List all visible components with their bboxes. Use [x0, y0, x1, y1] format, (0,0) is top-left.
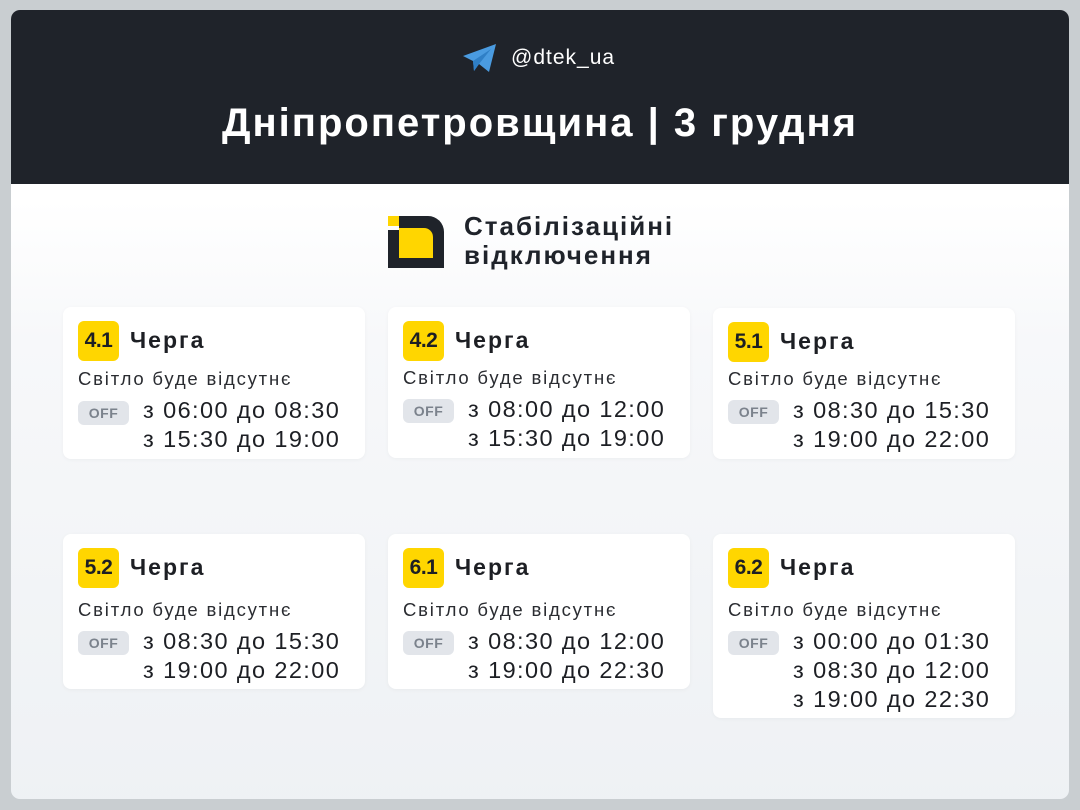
- card 6.2: з 19:00 до 22:30: [793, 686, 990, 712]
- card 5.2: з 08:30 до 15:30: [143, 628, 340, 654]
- card 6.2: Світло буде відсутнє: [728, 599, 942, 620]
- card 6.1: [388, 534, 690, 689]
- card 4.2: 4.2: [410, 329, 437, 352]
- card 5.2: з 19:00 до 22:00: [143, 657, 340, 683]
- handle text: @dtek_ua: [511, 46, 615, 69]
- card 5.2: [63, 534, 365, 689]
- card 4.1: з 06:00 до 08:30: [143, 397, 340, 423]
- card 5.2: Світло буде відсутнє: [78, 599, 292, 620]
- card 6.1: 6.1: [410, 556, 437, 579]
- heading: stabilization outages: Стабілізаційні: [464, 211, 674, 241]
- heading: stabilization outages: відключення: [464, 240, 653, 270]
- card 6.2: з 00:00 до 01:30: [793, 628, 990, 654]
- card 5.2: OFF: [89, 635, 118, 651]
- header bar: [11, 10, 1069, 184]
- card 6.1: Світло буде відсутнє: [403, 599, 617, 620]
- card 4.1: Світло буде відсутнє: [78, 368, 292, 389]
- card 4.1: [63, 307, 365, 459]
- heading: stabilization outages: [464, 211, 674, 270]
- card 4.2: OFF: [414, 403, 443, 419]
- card 4.1: Черга: [130, 327, 205, 353]
- card 6.2: 6.2: [735, 556, 762, 579]
- card 6.1: Черга: [455, 554, 530, 580]
- card 4.1: 4.1: [85, 329, 112, 352]
- card 5.1: [713, 308, 1015, 459]
- card 5.2: Черга: [130, 554, 205, 580]
- card 5.1: Світло буде відсутнє: [728, 368, 942, 389]
- card 5.1: з 19:00 до 22:00: [793, 426, 990, 452]
- icon: telegram: [463, 44, 496, 72]
- card 4.2: з 15:30 до 19:00: [468, 425, 665, 451]
- logo: [388, 216, 444, 268]
- card 6.2: з 08:30 до 12:00: [793, 657, 990, 683]
- title: Дніпропетровщина | 3 грудня: [222, 101, 858, 145]
- card 4.2: Черга: [455, 327, 530, 353]
- card 6.2: [713, 534, 1015, 718]
- card 4.1: OFF: [89, 405, 118, 421]
- card 4.2: [388, 307, 690, 458]
- card 6.2: OFF: [739, 635, 768, 651]
- card 5.1: 5.1: [735, 330, 762, 353]
- card 4.2: з 08:00 до 12:00: [468, 396, 665, 422]
- card 5.1: з 08:30 до 15:30: [793, 397, 990, 423]
- card 6.1: з 19:00 до 22:30: [468, 657, 665, 683]
- card 5.2: 5.2: [85, 556, 112, 579]
- card 6.1: з 08:30 до 12:00: [468, 628, 665, 654]
- card 4.2: Світло буде відсутнє: [403, 367, 617, 388]
- card 6.2: Черга: [780, 554, 855, 580]
- card 5.1: OFF: [739, 404, 768, 420]
- card 4.1: з 15:30 до 19:00: [143, 426, 340, 452]
- card 5.1: Черга: [780, 328, 855, 354]
- card 6.1: OFF: [414, 635, 443, 651]
